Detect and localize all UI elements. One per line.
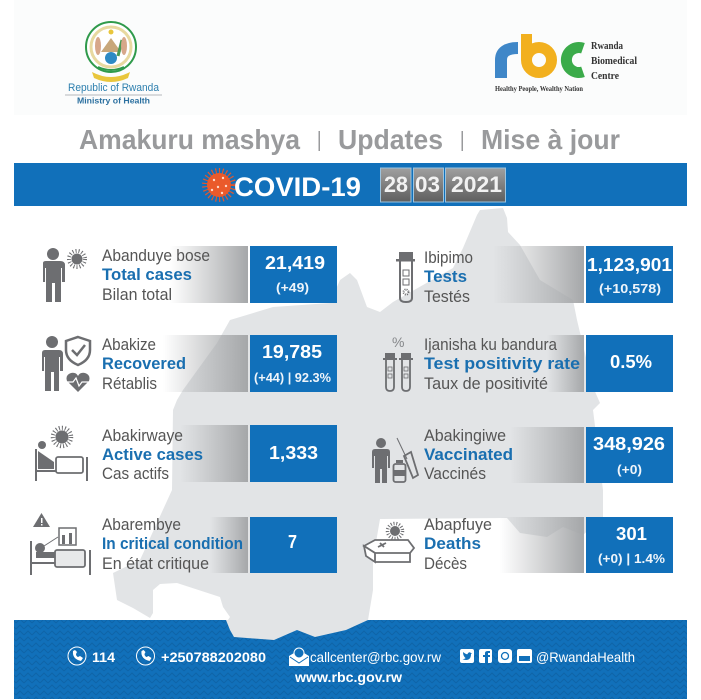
panel: in critical condition: In critical condition: [102, 534, 243, 553]
panel: recovered: 19,785: [262, 342, 322, 362]
icon: two tubes with percent: [383, 334, 413, 391]
panel: recovered: Abakize: [102, 335, 156, 354]
date: [380, 168, 506, 202]
logo: Republic of Rwanda, Ministry of Health: Ministry of Health: [77, 96, 150, 106]
panel: vaccinated: (+0): [617, 463, 642, 477]
panel: active cases: [35, 425, 337, 483]
panel: active cases: Abakirwaye: [102, 426, 183, 445]
date: 2021: [451, 172, 502, 197]
logo: Rwanda Biomedical Centre: Healthy People, Wealthy Nation: [495, 85, 583, 93]
date: 03: [415, 172, 440, 197]
logo: Republic of Rwanda, Ministry of Health: Republic of Rwanda: [68, 82, 160, 94]
icon: coffin with virus: [364, 524, 414, 562]
title: Mise à jour: [481, 124, 620, 155]
icon: email: [289, 648, 309, 666]
logo: Rwanda Biomedical Centre: Biomedical: [591, 56, 637, 67]
panel: recovered: Rétablis: [102, 374, 157, 393]
panel: vaccinated: [372, 426, 673, 483]
panel: tests: Ibipimo: [424, 248, 473, 267]
icon: whatsapp: [136, 647, 154, 665]
banner: COVID-19 and date: [14, 163, 687, 206]
panel: test positivity rate: Test positivity rate: [424, 354, 580, 373]
map of Rwanda: [113, 208, 603, 640]
panel: recovered: (+44) | 92.3%: [254, 371, 331, 385]
banner: COVID-19 and date: COVID-19: [234, 172, 361, 202]
logo: Rwanda Biomedical Centre: Centre: [591, 71, 619, 82]
panel: test positivity rate: Taux de positivité: [424, 374, 548, 393]
icon: warning and patient on monitor: [30, 513, 91, 575]
panel: tests: Tests: [424, 267, 467, 286]
panel: in critical condition: Abarembye: [102, 515, 181, 534]
panel: tests: 1,123,901: [587, 255, 672, 275]
panel: total cases: Bilan total: [102, 285, 172, 304]
icon: patient in bed with virus: [35, 428, 88, 481]
panel: test positivity rate: [383, 334, 673, 393]
icon: virus: [206, 172, 232, 198]
footer: contacts: [14, 620, 687, 699]
icon: two tubes with percent: %: [392, 334, 404, 350]
map tip over footer: [226, 620, 368, 640]
panel: total cases: Total cases: [102, 265, 192, 284]
emblem: [86, 22, 136, 82]
panel: recovered: Recovered: [102, 354, 186, 373]
footer: contacts: callcenter@rbc.gov.rw: [310, 649, 442, 665]
footer: contacts: @RwandaHealth: [536, 649, 635, 665]
icon: person with virus: [43, 248, 85, 302]
panel: deaths: (+0) | 1.4%: [598, 552, 665, 566]
title: Amakuru mashya: [79, 124, 300, 155]
panel: vaccinated: Vaccinés: [424, 464, 486, 483]
panel: in critical condition: En état critique: [102, 554, 209, 573]
panel: deaths: [364, 515, 673, 573]
panel: vaccinated: Abakingiwe: [424, 426, 506, 445]
icon: test tube: [396, 252, 415, 302]
title: [79, 124, 620, 155]
panel: tests: [396, 246, 673, 306]
panel: tests: Testés: [424, 287, 470, 306]
footer: contacts: +250788202080: [161, 649, 266, 665]
panel: total cases: 21,419: [265, 253, 325, 273]
panel: active cases: 1,333: [269, 443, 318, 463]
panel: total cases: Abanduye bose: [102, 246, 210, 265]
panel: vaccinated: 348,926: [593, 434, 665, 454]
date: 28: [384, 172, 408, 197]
footer: contacts: www.rbc.gov.rw: [294, 669, 402, 685]
panel: active cases: Cas actifs: [102, 464, 169, 483]
icon: phone: [68, 647, 86, 665]
logo: Republic of Rwanda, Ministry of Health: [65, 22, 162, 106]
panel: deaths: Deaths: [424, 534, 481, 553]
logo: Rwanda Biomedical Centre: Rwanda: [591, 41, 624, 52]
panel: vaccinated: Vaccinated: [424, 445, 513, 464]
title: Updates: [338, 124, 443, 155]
panel: total cases: (+49): [276, 281, 309, 295]
panel: deaths: 301: [616, 524, 647, 544]
panel: in critical condition: [30, 513, 337, 575]
footer: contacts: 114: [92, 649, 115, 665]
icon: person with shield and heart: [42, 336, 90, 392]
panel: tests: (+10,578): [599, 282, 661, 296]
icon: person with syringe and vial: [372, 438, 418, 483]
panel: test positivity rate: 0.5%: [610, 352, 652, 372]
panel: deaths: Décès: [424, 554, 467, 573]
logo: Rwanda Biomedical Centre: [495, 34, 637, 93]
panel: total cases: [43, 246, 337, 304]
panel: deaths: Abapfuye: [424, 515, 492, 534]
panel: active cases: Active cases: [102, 445, 203, 464]
icons: social media: [460, 649, 532, 663]
panel: in critical condition: 7: [288, 532, 297, 552]
panel: recovered: [42, 335, 337, 393]
panel: test positivity rate: Ijanisha ku bandura: [424, 335, 557, 354]
